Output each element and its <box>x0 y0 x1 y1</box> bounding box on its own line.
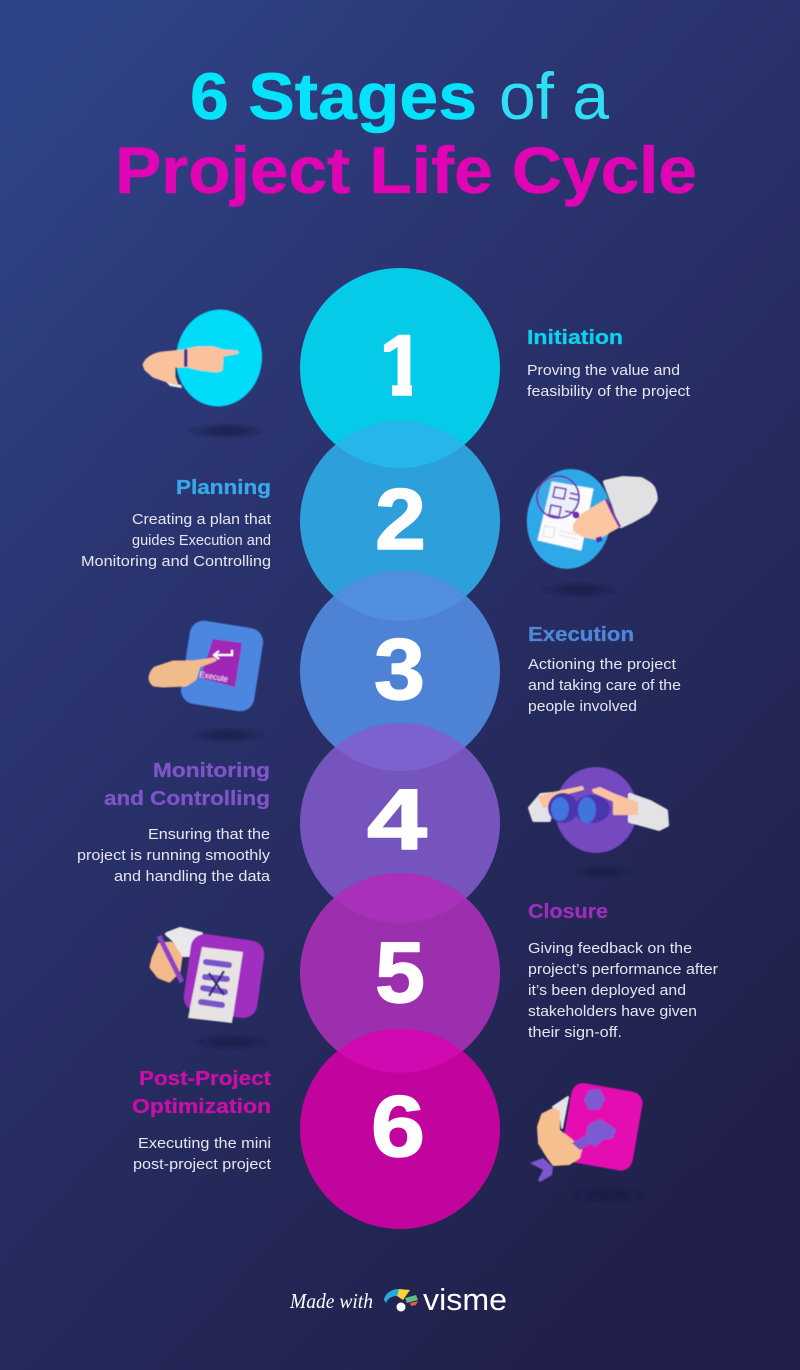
number 6: 6 <box>371 1079 425 1175</box>
arm <box>539 1110 580 1164</box>
purple key <box>200 639 242 687</box>
sleeve tail <box>165 381 182 388</box>
heading: Monitoring and Controlling: and Controlling <box>104 788 270 810</box>
heading: Execution: Execution <box>528 624 634 646</box>
wrench head <box>530 1158 553 1182</box>
cuff and magnifier handle <box>606 499 620 527</box>
visme logo mark <box>384 1289 418 1312</box>
right lens <box>578 797 596 823</box>
number 3: 3 <box>374 622 425 718</box>
left hand <box>539 787 583 807</box>
stage 2 text <box>81 477 272 570</box>
cyan disc <box>171 305 267 411</box>
icon: magnifier over checklist <box>520 464 656 598</box>
body: Planning: Monitoring and Controlling <box>81 553 271 570</box>
hand <box>575 502 618 538</box>
number 4: 4 <box>367 772 427 868</box>
body: Monitoring and Controlling: and handling the data <box>114 868 271 885</box>
body: Post-Project Optimization <box>133 1135 272 1173</box>
body: Initiation <box>527 362 691 400</box>
faint form lines <box>543 526 578 539</box>
title line 1: of a <box>499 59 609 133</box>
sleeve <box>167 929 201 955</box>
body: Monitoring and Controlling: Ensuring that the <box>148 826 270 843</box>
icon: pointing hand on cyan disc <box>143 305 267 439</box>
body: Closure: Giving feedback on the <box>528 940 692 957</box>
stage 1 text <box>527 327 691 400</box>
visme wordmark: visme <box>423 1282 507 1317</box>
body: Post-Project Optimization: post-project project <box>133 1156 272 1173</box>
left lens <box>551 797 569 821</box>
blue tile <box>179 619 265 713</box>
circle 1 <box>300 268 500 468</box>
overlap 3-4 <box>335 723 465 771</box>
heading: Post-Project Optimization: Optimization <box>132 1096 271 1118</box>
left sleeve <box>530 794 552 820</box>
made with: Made with <box>289 1289 373 1313</box>
body: Monitoring and Controlling <box>77 826 271 885</box>
bolt top <box>584 1089 605 1110</box>
body: Execution <box>528 656 681 715</box>
body: Monitoring and Controlling: project is running smoothly <box>77 847 271 864</box>
body: Closure: stakeholders have given <box>528 1003 697 1020</box>
magnifier ring <box>537 476 579 518</box>
heading: Closure: Closure <box>528 901 608 923</box>
stage numbers <box>367 318 427 1175</box>
heading: Planning: Planning <box>176 477 271 499</box>
text lines <box>201 962 229 1005</box>
right hand <box>593 788 637 814</box>
body: Post-Project Optimization: Executing the mini <box>138 1135 271 1152</box>
body: Closure: their sign-off. <box>528 1024 622 1041</box>
heading: Monitoring and Controlling: Monitoring <box>153 760 270 782</box>
body: Execution: Actioning the project <box>528 656 677 673</box>
overlap 2-3 <box>334 571 466 621</box>
circle 4 <box>300 723 500 923</box>
bolt bottom <box>585 1119 616 1147</box>
forearm and hand <box>143 347 238 385</box>
key label: Execute <box>199 669 229 684</box>
number 5: 5 <box>375 925 425 1021</box>
stage 6 text <box>132 1068 272 1173</box>
body: Planning <box>81 511 272 570</box>
body: Initiation: Proving the value and <box>527 362 680 379</box>
wrench handle <box>572 1133 597 1150</box>
body: Closure: it’s been deployed and <box>528 982 686 999</box>
number 2: 2 <box>375 472 426 568</box>
paper <box>538 482 593 550</box>
icon shadow <box>186 423 266 439</box>
stage 4 text <box>77 760 271 885</box>
pen <box>159 936 182 982</box>
magenta tile <box>560 1081 644 1172</box>
heading: Initiation: Initiation <box>527 327 623 349</box>
icon shadow <box>570 1187 646 1203</box>
icon: binoculars <box>530 767 667 879</box>
circle 6 <box>300 1029 500 1229</box>
overlap 5-6 <box>337 1029 463 1073</box>
body: Closure: project’s performance after <box>528 961 718 978</box>
title line 2: Project Life Cycle <box>115 133 697 207</box>
circle 5 <box>300 873 500 1073</box>
title line 1: 6 Stages <box>190 59 477 133</box>
icon shadow <box>194 1034 270 1050</box>
overlap 1-2 <box>336 421 464 468</box>
icon: signing document <box>152 929 270 1050</box>
right sleeve <box>630 795 667 829</box>
title <box>115 59 697 207</box>
circle 2 <box>300 421 500 621</box>
enter arrow <box>214 650 232 659</box>
body: Planning: Creating a plan that <box>132 511 272 528</box>
cross mark <box>209 971 224 996</box>
body: Planning: guides Execution and <box>132 532 271 549</box>
heading: Monitoring and Controlling <box>104 760 270 810</box>
body: Initiation: feasibility of the project <box>527 383 691 400</box>
hand <box>152 944 180 980</box>
body: Execution: people involved <box>528 698 637 715</box>
wristband <box>184 349 188 367</box>
icon: execute key <box>150 619 268 743</box>
purple disc <box>555 767 637 853</box>
icon: wrench and bolts <box>530 1081 646 1203</box>
central stage circles <box>300 268 500 1229</box>
overlap 4-5 <box>334 873 466 923</box>
checklist marks <box>549 487 579 517</box>
footer: made with visme <box>289 1282 507 1317</box>
stage 3 text <box>528 624 681 715</box>
icon shadow <box>571 865 635 879</box>
sleeve <box>605 478 656 526</box>
hand <box>150 659 215 686</box>
circle 3 <box>300 571 500 771</box>
icon shadow <box>188 727 268 743</box>
blue disc <box>520 464 618 574</box>
icon shadow <box>540 582 620 598</box>
body: Closure <box>528 940 718 1041</box>
title line 1 <box>190 59 609 133</box>
sleeve <box>553 1097 568 1128</box>
heading: Post-Project Optimization: Post-Project <box>139 1068 271 1090</box>
purple tile <box>182 932 266 1020</box>
stage 5 text <box>528 901 718 1041</box>
heading: Post-Project Optimization <box>132 1068 271 1118</box>
number 1: 1 <box>379 318 425 414</box>
body: Execution: and taking care of the <box>528 677 681 694</box>
paper <box>188 947 243 1023</box>
binocular body <box>548 793 610 823</box>
